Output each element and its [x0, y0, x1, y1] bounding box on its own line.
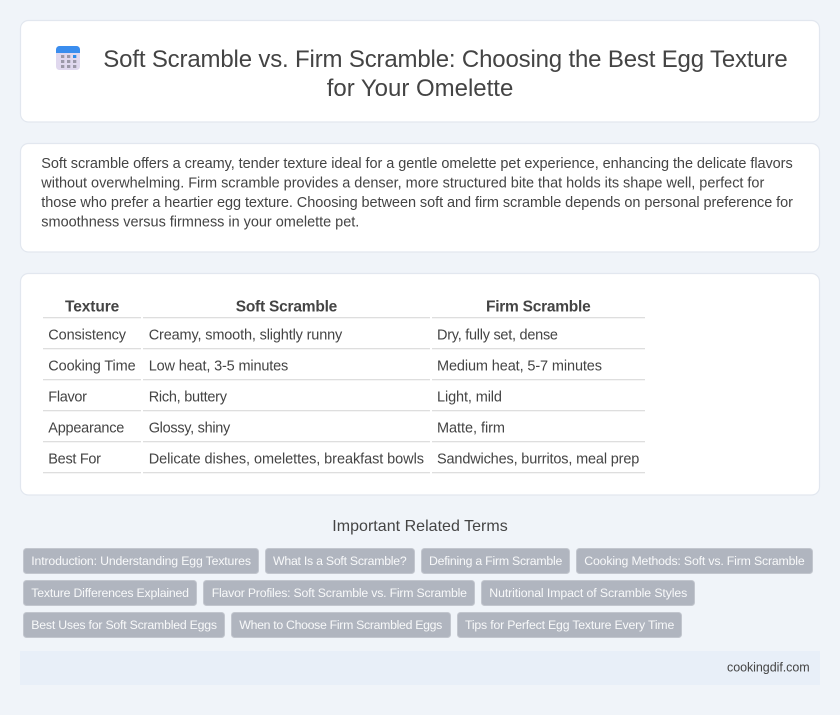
table header row — [65, 299, 591, 316]
tag list: related terms — [24, 548, 812, 638]
tag: Best Uses for Soft Scrambled Eggs — [31, 618, 217, 632]
table row: appearance — [48, 420, 505, 436]
table row: cooking time — [48, 358, 602, 374]
text block: introduction paragraph: Soft scramble offers a creamy, tender texture ideal for a gentle omelette pet experience, enhancing the delicate flavors — [41, 156, 793, 172]
table row: flavor: Flavor — [48, 389, 87, 405]
title: for Your Omelette — [327, 75, 513, 102]
tag — [458, 612, 682, 638]
table row: appearance: Glossy, shiny — [149, 420, 231, 436]
tag: Defining a Firm Scramble — [429, 554, 562, 568]
tag — [204, 580, 474, 606]
tag — [232, 612, 450, 638]
tag: Introduction: Understanding Egg Textures — [31, 554, 251, 568]
tag — [24, 548, 258, 574]
table row: consistency: Consistency — [48, 327, 127, 343]
table row: best for: Best For — [48, 451, 101, 467]
text block: introduction paragraph — [40, 156, 793, 230]
table row: consistency — [48, 327, 558, 343]
panel: header — [20, 20, 820, 122]
footer source text: cookingdif.com — [727, 661, 810, 675]
tag — [24, 580, 196, 606]
table row: appearance: Matte, firm — [437, 420, 505, 436]
table row: best for — [48, 451, 639, 467]
table row: best for: Sandwiches, burritos, meal prep — [437, 451, 639, 467]
table row: cooking time: Cooking Time — [48, 358, 136, 374]
tag: What Is a Soft Scramble? — [273, 554, 407, 568]
tag: Texture Differences Explained — [31, 586, 189, 600]
tag: Cooking Methods: Soft vs. Firm Scramble — [584, 554, 805, 568]
footer — [20, 651, 820, 685]
text block: introduction paragraph: smoothness versus firmness in your omelette pet. — [41, 214, 359, 230]
panel: introduction — [20, 144, 820, 252]
tag — [482, 580, 694, 606]
tag — [266, 548, 414, 574]
table row: consistency: Dry, fully set, dense — [437, 327, 558, 343]
tag: Tips for Perfect Egg Texture Every Time — [465, 618, 674, 632]
table row: consistency: Creamy, smooth, slightly runny — [149, 327, 343, 343]
table row: flavor: Rich, buttery — [149, 389, 228, 405]
heading: important related terms: Important Related Terms — [332, 518, 508, 535]
text block: introduction paragraph: those who prefer a heartier egg texture. Choosing between soft and firm scramble depends on personal preference for — [41, 195, 793, 211]
icon: calendar — [56, 46, 80, 70]
table header row: Texture — [65, 299, 120, 316]
table row: flavor: Light, mild — [437, 389, 502, 405]
table row: flavor — [48, 389, 502, 405]
title — [103, 46, 788, 102]
tag — [576, 548, 812, 574]
table header row: Firm Scramble — [486, 299, 591, 316]
tag: Flavor Profiles: Soft Scramble vs. Firm Scramble — [212, 586, 467, 600]
table row: cooking time: Low heat, 3-5 minutes — [149, 358, 288, 374]
table row: best for: Delicate dishes, omelettes, breakfast bowls — [149, 451, 424, 467]
table row: cooking time: Medium heat, 5-7 minutes — [437, 358, 602, 374]
tag: Nutritional Impact of Scramble Styles — [489, 586, 687, 600]
table header row: Soft Scramble — [236, 299, 338, 316]
tag — [24, 612, 224, 638]
tag — [422, 548, 570, 574]
text block: introduction paragraph: without overwhelming. Firm scramble provides a denser, more structured bite that holds its shape well, perfect for — [40, 176, 764, 192]
panel: comparison table — [20, 274, 820, 495]
tag: When to Choose Firm Scrambled Eggs — [239, 618, 442, 632]
table row: appearance: Appearance — [48, 420, 124, 436]
title: Soft Scramble vs. Firm Scramble: Choosing the Best Egg Texture — [103, 46, 788, 73]
